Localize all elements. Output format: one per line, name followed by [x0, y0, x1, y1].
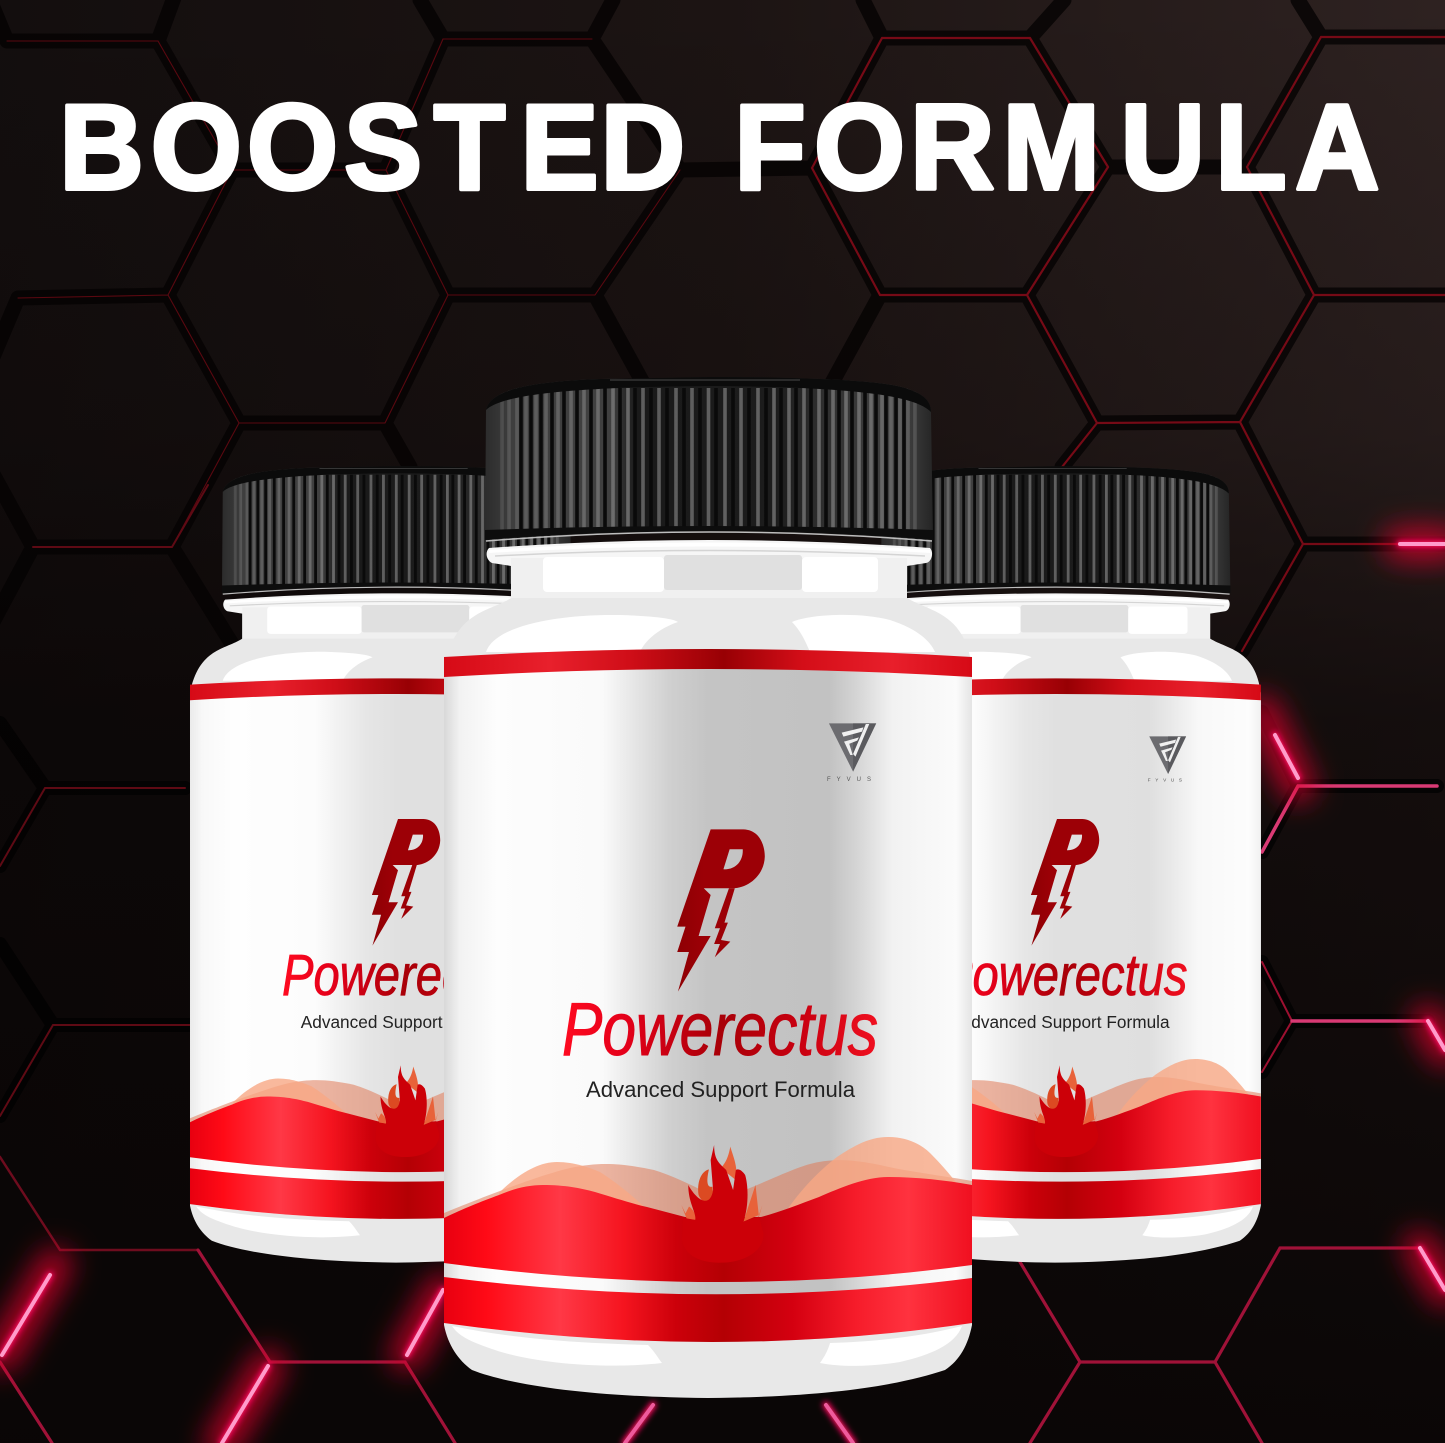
bottle: right: FYVUS [1148, 777, 1187, 782]
bottle: center [444, 377, 972, 1398]
bottle cap [485, 377, 933, 541]
bottle: left: Powerectus [282, 943, 529, 1008]
brand name: Powerectus [562, 987, 878, 1071]
label background [444, 659, 972, 1342]
bottle: left: Advanced Support Formula [301, 1012, 511, 1032]
icon: lightning P logo [677, 829, 765, 992]
bottle: right: Powerectus [941, 943, 1188, 1008]
shoulder highlights [486, 615, 935, 652]
top red band [444, 649, 972, 677]
bottle: left [190, 466, 602, 1263]
bottle: right [849, 466, 1261, 1263]
title: BOOSTED FORMULA [59, 80, 1380, 216]
icon: flame [681, 1145, 763, 1263]
peach waves [444, 1137, 972, 1240]
red wave [444, 1177, 972, 1282]
bottle neck and rim [487, 540, 932, 605]
tagline: Advanced Support Formula [586, 1077, 856, 1102]
neon glow lines [2, 544, 1445, 1443]
icon: brand triangle [829, 723, 876, 772]
brand mark text: FYVUS [827, 777, 877, 783]
bottle: right: Advanced Support Formula [960, 1012, 1170, 1032]
lower red band [444, 1277, 972, 1342]
bottle body [444, 598, 972, 1398]
bottom highlights [452, 1326, 962, 1366]
